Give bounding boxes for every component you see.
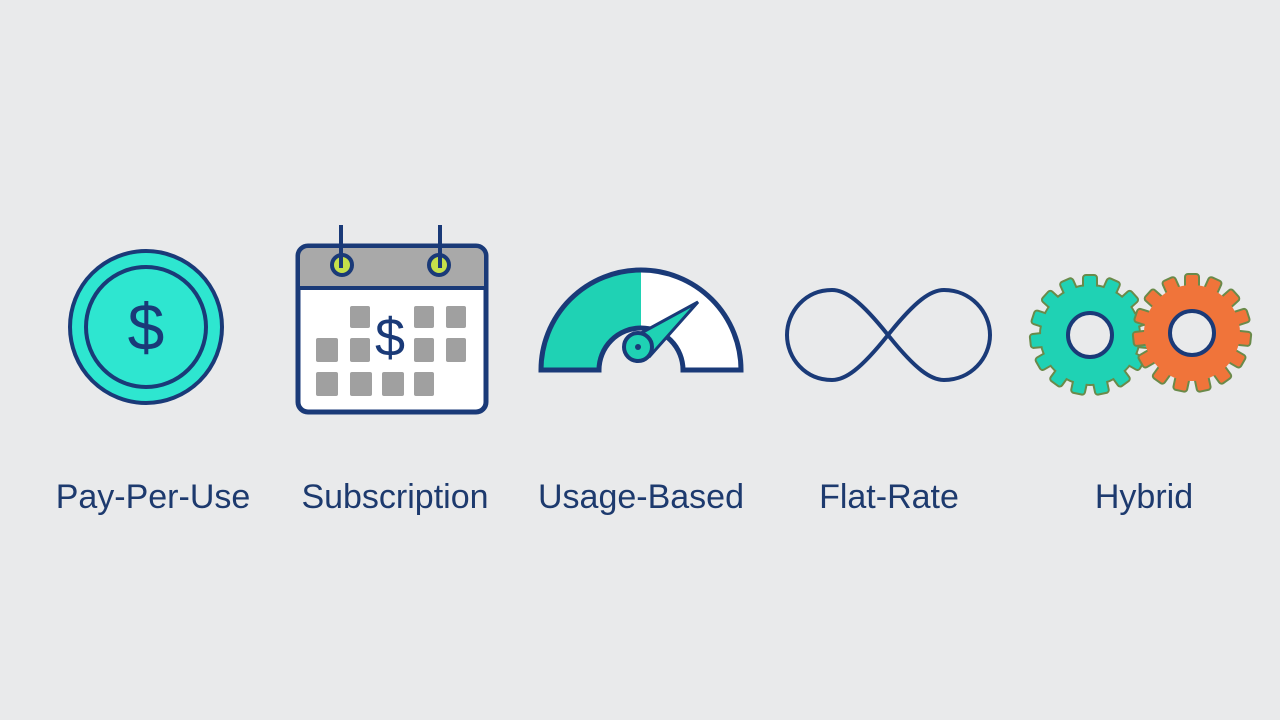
label: Subscription: Subscription — [301, 478, 489, 516]
icon: infinity — [787, 290, 990, 380]
icon: coin — [70, 251, 222, 403]
icon: gears — [1030, 274, 1251, 395]
icon: calendar — [298, 225, 486, 412]
icon: gauge — [541, 270, 741, 370]
label: Flat-Rate: Flat-Rate — [819, 478, 959, 516]
icon: coin: $ — [128, 290, 164, 364]
label: Pay-Per-Use: Pay-Per-Use — [56, 478, 250, 516]
label: Usage-Based: Usage-Based — [538, 478, 744, 516]
icon: calendar: $ — [375, 308, 405, 368]
label: Hybrid: Hybrid — [1095, 478, 1193, 516]
